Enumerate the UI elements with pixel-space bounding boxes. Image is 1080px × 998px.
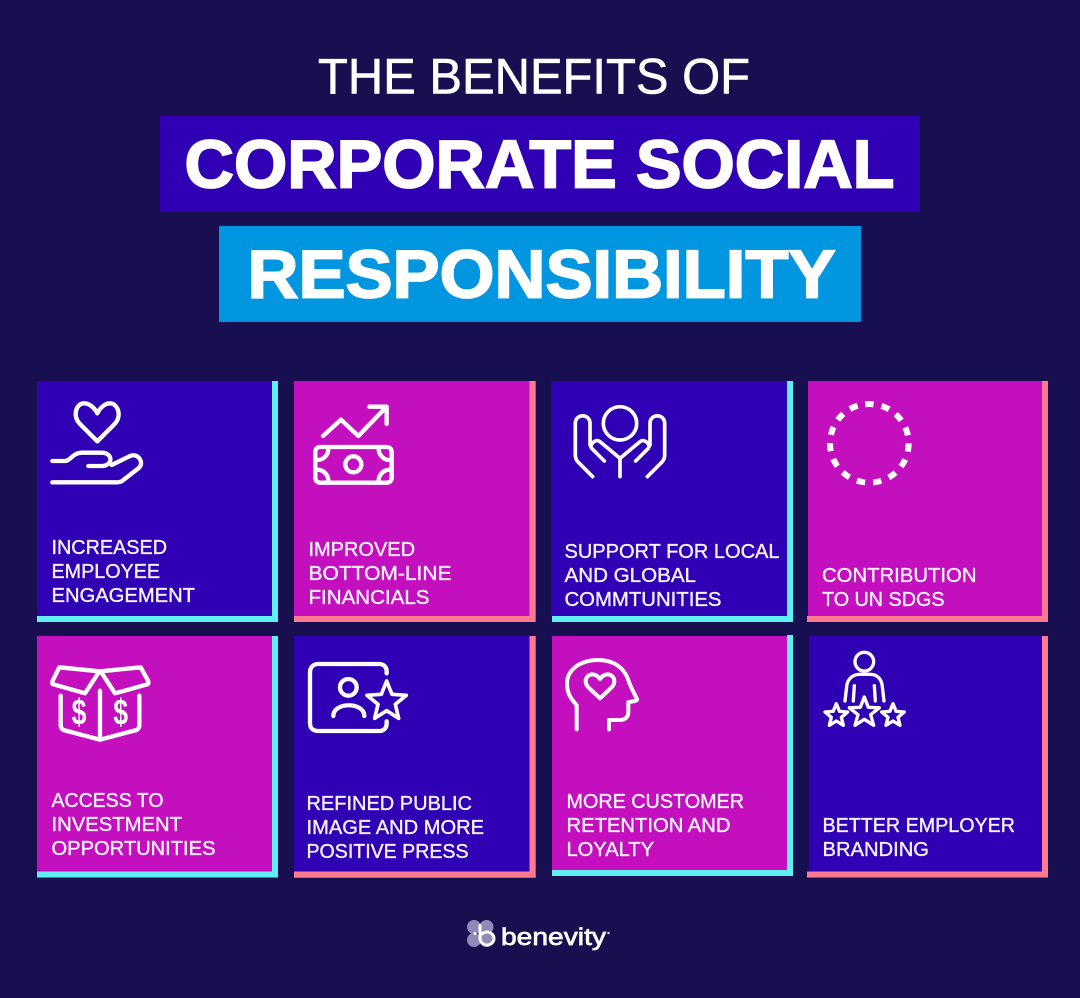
banner: responsibility: RESPONSIBILITY — [248, 236, 836, 312]
label: ACCESS TO — [52, 790, 164, 812]
label: RETENTION AND — [566, 815, 730, 837]
banner: corporate social: CORPORATE SOCIAL — [184, 126, 894, 202]
label: LOYALTY — [566, 839, 654, 861]
label: IMPROVED — [308, 539, 415, 561]
label: COMMTUNITIES — [564, 589, 722, 611]
label — [306, 793, 484, 863]
title block — [160, 48, 920, 322]
label: IMAGE AND MORE — [306, 817, 484, 839]
label: BETTER EMPLOYER — [822, 815, 1015, 837]
label: CONTRIBUTION — [822, 565, 976, 587]
registered mark — [607, 932, 610, 934]
label: REFINED PUBLIC — [306, 793, 472, 815]
label — [822, 815, 1015, 861]
label — [52, 790, 216, 860]
logo: benevity — [467, 920, 610, 951]
icon: banknote with rising arrow — [315, 407, 392, 483]
label: INVESTMENT — [52, 814, 182, 836]
icon: open box with dollars — [52, 667, 148, 740]
label: EMPLOYEE — [52, 561, 160, 583]
label: TO UN SDGS — [822, 589, 944, 611]
banner: responsibility — [219, 226, 861, 322]
wordmark: benevity — [501, 924, 606, 951]
label: INCREASED — [52, 537, 167, 559]
panel: more customer retention and loyalty — [552, 635, 793, 876]
label: FINANCIALS — [308, 587, 430, 609]
panel: refined public image and more positive press — [294, 636, 536, 878]
panel: contribution to UN SDGs — [807, 381, 1048, 622]
icon: open box with dollars: $ — [113, 691, 128, 732]
label — [566, 791, 744, 861]
icon: person with three stars — [825, 652, 904, 725]
panel: improved bottom-line financials — [294, 381, 536, 622]
label — [52, 537, 195, 607]
icon: logo mark — [467, 920, 494, 947]
label — [564, 541, 780, 611]
icon: dashed circle — [826, 400, 913, 487]
label: MORE CUSTOMER — [566, 791, 744, 813]
panel: better employer branding — [807, 636, 1048, 878]
label — [308, 539, 452, 609]
panel: increased employee engagement — [37, 381, 278, 622]
label: SUPPORT FOR LOCAL — [564, 541, 780, 563]
label: BOTTOM-LINE — [308, 563, 452, 585]
panel: access to investment opportunities — [37, 636, 278, 878]
icon: profile card with star — [310, 664, 406, 731]
label — [822, 565, 976, 611]
label: ENGAGEMENT — [52, 585, 195, 607]
panel: support for local and global communities — [551, 381, 793, 622]
icon: head with heart — [567, 660, 637, 729]
icon: open box with dollars: $ — [72, 691, 87, 732]
heading: the benefits of: THE BENEFITS OF — [318, 48, 750, 104]
icon: heart in hand — [52, 403, 141, 482]
label: BRANDING — [822, 839, 929, 861]
label: AND GLOBAL — [564, 565, 696, 587]
label: POSITIVE PRESS — [306, 841, 468, 863]
icon: hands holding person — [575, 407, 665, 477]
label: OPPORTUNITIES — [52, 838, 216, 860]
